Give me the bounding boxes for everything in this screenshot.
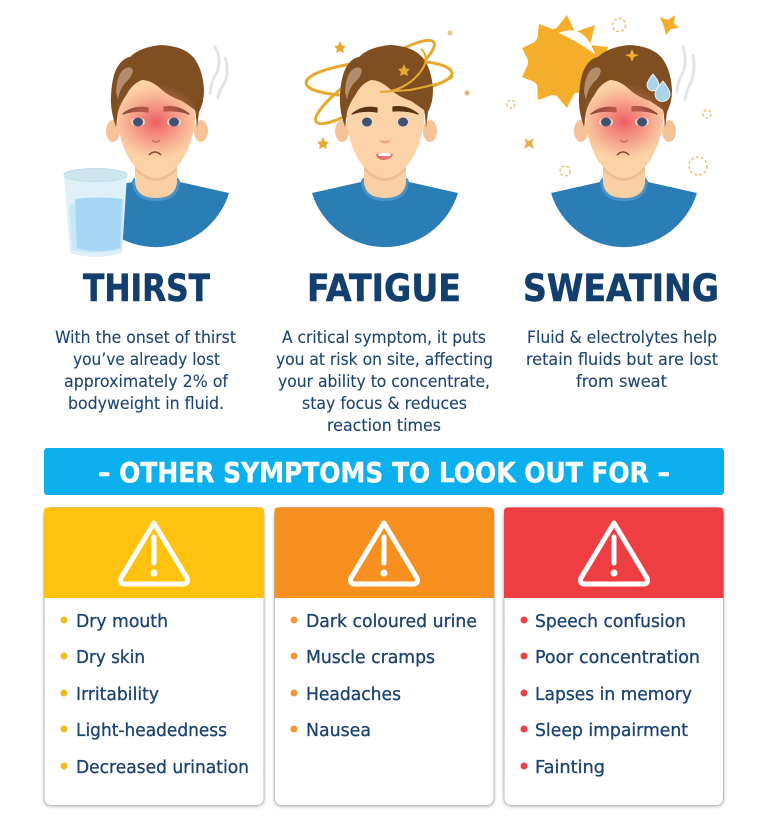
symptom list: Dark coloured urine [306, 612, 477, 632]
icons: sparkles and rings [507, 15, 711, 176]
text block: sweating description: Fluid & electrolytes help [527, 328, 717, 347]
panel: moderate symptoms (orange) [274, 508, 494, 806]
symptom list [290, 612, 477, 741]
text block: thirst description: With the onset of thirst [55, 328, 236, 347]
text block: fatigue description: your ability to concentrate, [278, 372, 490, 391]
heading: FATIGUE: FATIGUE [307, 267, 461, 310]
icon: heat steam [677, 47, 694, 100]
text block: thirst description [55, 328, 236, 413]
orbit rings behind head [305, 30, 453, 134]
panel: mild symptoms (yellow) [44, 508, 264, 806]
icons: dizzy stars [317, 30, 470, 149]
text block: fatigue description: you at risk on site, affecting [276, 350, 493, 369]
heading: SWEATING: SWEATING [523, 267, 719, 310]
symptom list: Muscle cramps [306, 648, 435, 668]
symptom list: Poor concentration [535, 648, 700, 668]
symptom list: Light-headedness [76, 721, 227, 741]
text block: fatigue description [276, 328, 493, 435]
symptom list: Dry skin [76, 648, 145, 668]
text block: sweating description [526, 328, 719, 391]
symptom list: Speech confusion [535, 612, 686, 632]
banner: other symptoms: – OTHER SYMPTOMS TO LOOK OUT FOR – [98, 457, 670, 489]
card header with warning icon [44, 508, 264, 598]
person: dazed face [312, 45, 458, 247]
card header with warning icon [274, 508, 494, 598]
text block: sweating description: from sweat [576, 372, 668, 391]
person: flushed face [551, 45, 697, 247]
icon: glass of water [64, 168, 127, 257]
text block: fatigue description: reaction times [327, 416, 441, 435]
illustration: sweating person with sun [507, 15, 711, 247]
symptom list: Sleep impairment [535, 721, 688, 741]
text block: thirst description: approximately 2% of [64, 372, 229, 391]
illustration: thirst person with glass of water [64, 45, 229, 257]
symptom list: Dry mouth [76, 612, 168, 632]
icon: sun [522, 15, 608, 108]
icon: sweat drops [647, 74, 670, 102]
illustration: fatigue person with dizzy orbits [305, 30, 470, 247]
symptom list: Headaches [306, 685, 401, 705]
icon: heat steam [210, 47, 227, 98]
symptom list: Decreased urination [76, 758, 249, 778]
symptom list: Nausea [306, 721, 371, 741]
text block: thirst description: you’ve already lost [73, 350, 220, 369]
panel: severe symptoms (red) [504, 508, 724, 806]
card header with warning icon [504, 508, 724, 598]
text block: sweating description: retain fluids but are lost [526, 350, 719, 369]
symptom list: Lapses in memory [535, 685, 692, 705]
symptom list [60, 612, 249, 778]
heading: THIRST: THIRST [83, 267, 211, 310]
symptom list: Fainting [535, 758, 605, 778]
banner: other symptoms [44, 448, 724, 495]
symptom list: Irritability [76, 685, 159, 705]
symptom list [520, 612, 700, 778]
person: flushed face [106, 45, 229, 248]
text block: fatigue description: A critical symptom, it puts [282, 328, 486, 347]
text block: thirst description: bodyweight in fluid. [68, 394, 224, 413]
text block: fatigue description: stay focus & reduces [302, 394, 467, 413]
orbit ring in front of hair [380, 49, 453, 92]
